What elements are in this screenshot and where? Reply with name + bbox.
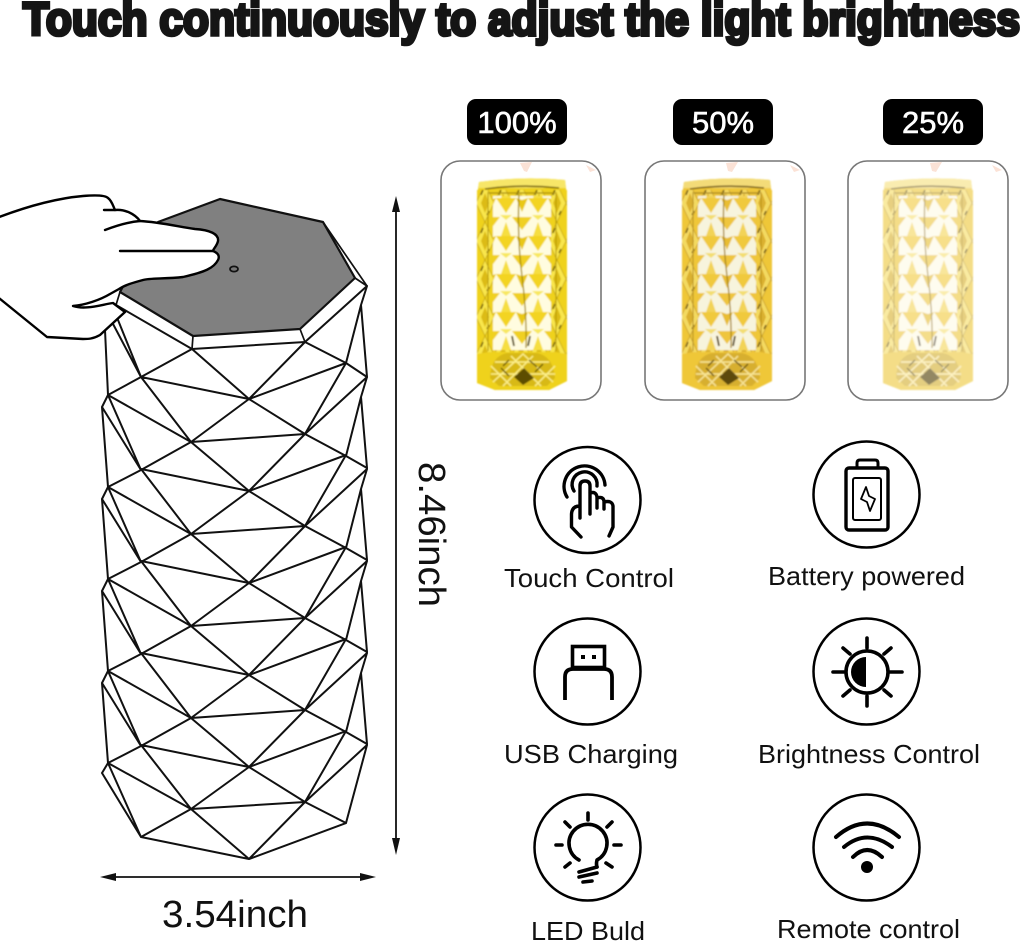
brightness 25% badge: 25% (902, 105, 964, 140)
panel: lamp at 25% (848, 161, 1008, 400)
lamp facet lines (102, 286, 367, 859)
label: USB Charging (504, 739, 678, 769)
feature: brightness control (758, 618, 980, 769)
lamp line drawing with hand (0, 195, 367, 859)
feature: LED bulb (531, 794, 645, 944)
width arrow (100, 873, 376, 881)
feature: USB charging (504, 618, 678, 769)
lamp top face (120, 199, 355, 336)
icon: bulb (534, 794, 640, 900)
height arrow (392, 196, 400, 855)
icon: battery (814, 442, 920, 548)
icon: wireless (814, 794, 920, 900)
label: Remote control (777, 914, 960, 944)
panel: lamp at 100% (441, 161, 601, 400)
finger creases (104, 210, 213, 251)
feature: remote control (777, 794, 960, 944)
brightness 50% badge (673, 99, 773, 145)
lamp rim bevel (116, 222, 367, 349)
panel: lamp at 50% (645, 161, 805, 400)
top sensor dot (230, 266, 238, 272)
label: Touch Control (504, 563, 674, 593)
brightness 100% badge: 100% (477, 105, 557, 140)
icon: brightness (814, 618, 920, 724)
width label: 3.54inch (162, 894, 308, 936)
label: Battery powered (768, 561, 965, 591)
height label: 8.46inch (410, 462, 452, 607)
label: Brightness Control (758, 739, 980, 769)
brightness 100% badge (467, 99, 567, 145)
icon: USB (534, 618, 640, 724)
icon: touch (534, 447, 640, 553)
feature: battery powered (768, 442, 965, 591)
brightness 25% badge (883, 99, 983, 145)
hand (0, 195, 219, 339)
brightness 50% badge: 50% (692, 105, 754, 140)
feature: touch control (504, 447, 674, 593)
